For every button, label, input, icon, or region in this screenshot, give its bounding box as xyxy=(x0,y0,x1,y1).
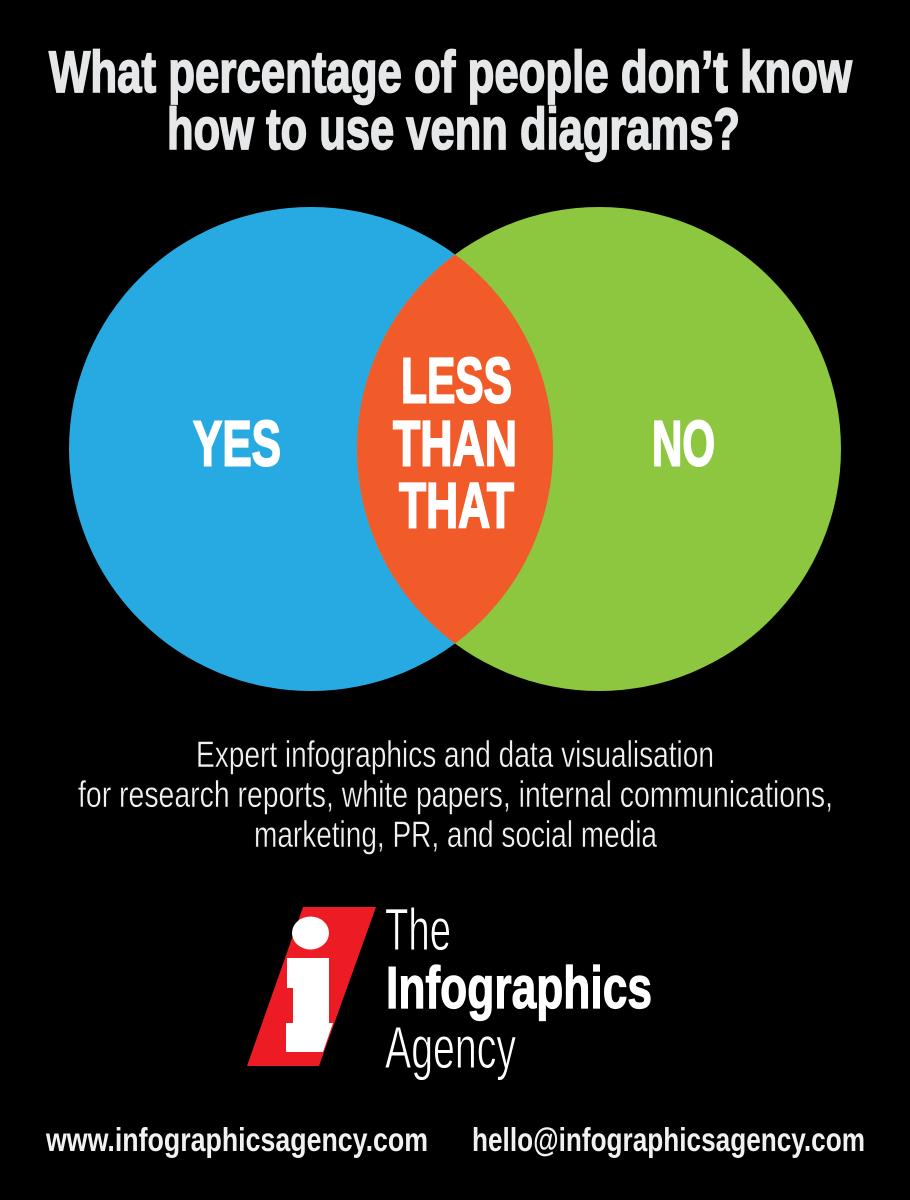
logo wordmark: Agency xyxy=(385,1015,516,1081)
icon: red i mark xyxy=(247,907,376,1066)
description text xyxy=(78,734,833,855)
logo wordmark: Infographics xyxy=(386,955,652,1021)
overlap: less than that xyxy=(357,254,553,644)
description text: marketing, PR, and social media xyxy=(254,814,657,855)
label: less than that: LESS xyxy=(401,344,512,416)
label: less than that: THAT xyxy=(399,470,514,542)
label: yes: YES xyxy=(193,408,281,480)
logo wordmark: The xyxy=(385,897,451,963)
label: less than that: THAN xyxy=(393,408,517,480)
label: less than that xyxy=(393,344,517,542)
venn diagram xyxy=(69,207,841,691)
footer: website: www.infographicsagency.com xyxy=(45,1121,428,1158)
circle: no xyxy=(357,207,841,691)
label: no: NO xyxy=(652,408,715,480)
description text: Expert infographics and data visualisation xyxy=(196,734,714,775)
logo wordmark xyxy=(385,897,652,1081)
title: how to use venn diagrams? xyxy=(167,97,740,162)
circle: yes xyxy=(69,207,553,691)
title xyxy=(49,40,853,162)
logo xyxy=(247,897,652,1081)
